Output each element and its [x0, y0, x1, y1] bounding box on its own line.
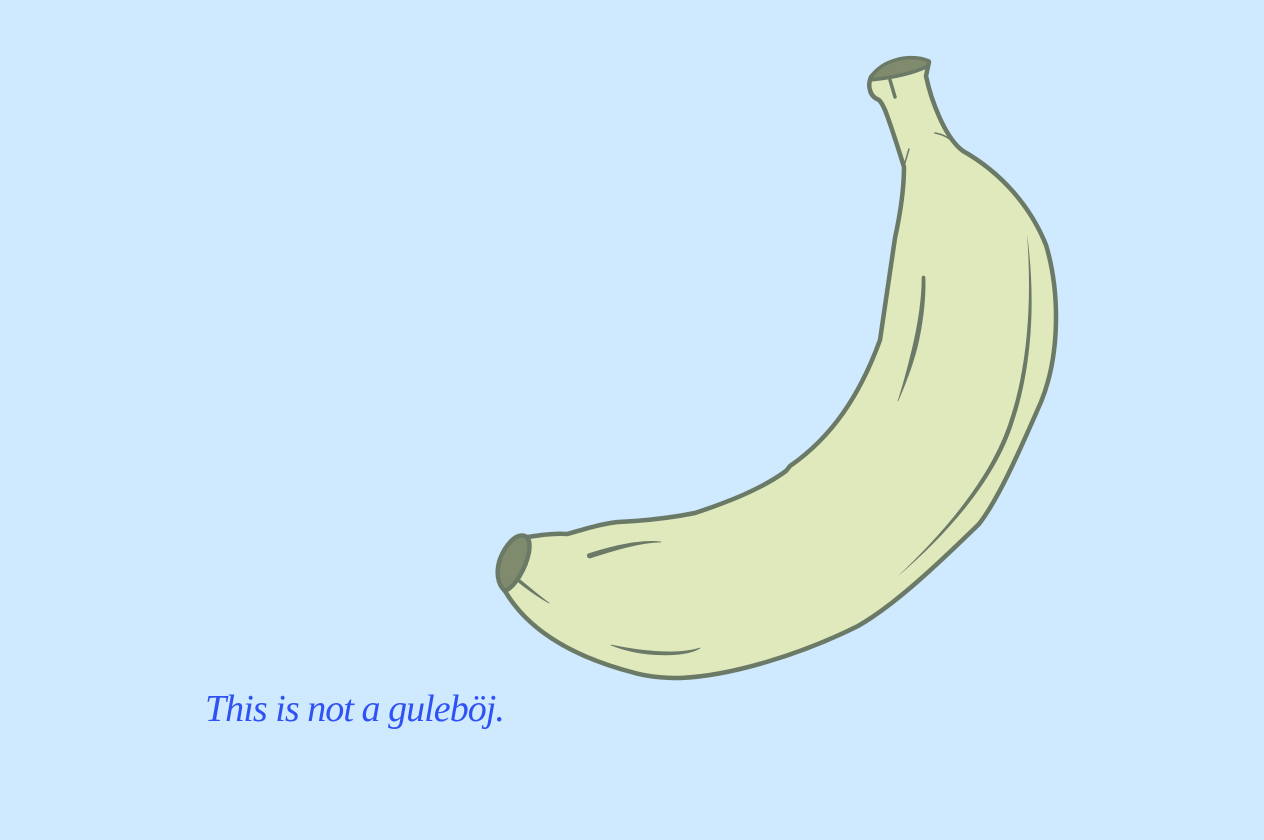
mark lower body — [611, 645, 700, 655]
banana body — [505, 60, 1056, 678]
mark upper body — [587, 541, 661, 558]
ridge line centre — [898, 276, 925, 401]
stem cap — [870, 58, 929, 80]
stem marks — [890, 80, 951, 166]
tip cap — [498, 536, 530, 591]
ridge line right — [897, 234, 1032, 577]
mark near tip — [517, 579, 549, 603]
caption: This is not a guleböj. — [205, 688, 504, 730]
